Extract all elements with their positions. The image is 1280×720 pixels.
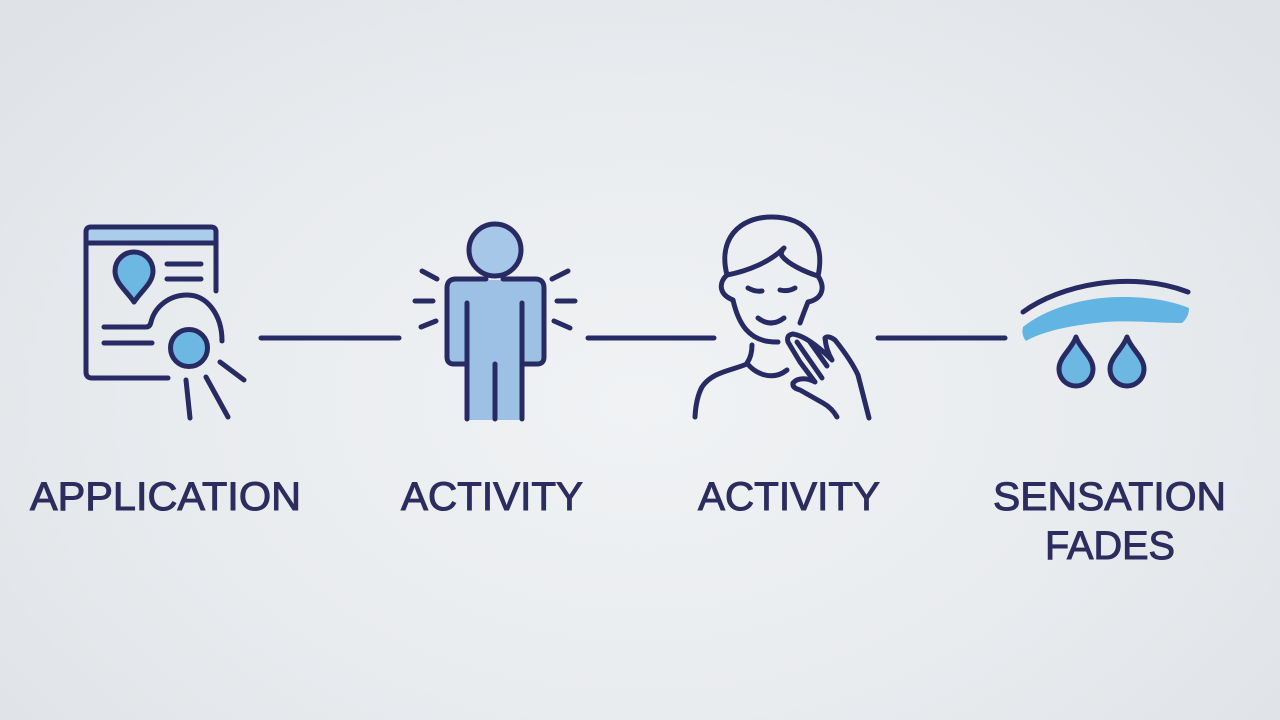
label: activity 1: ACTIVITY [401, 475, 583, 519]
icon: face with hand applying to neck [695, 217, 869, 418]
label: activity 2: ACTIVITY [698, 475, 880, 519]
connector line 1 [261, 336, 399, 340]
icon: brow arc, fading band and drops [1022, 281, 1189, 386]
label: sensation fades: FADES [1045, 524, 1175, 568]
label: sensation fades [993, 475, 1226, 568]
label: application: APPLICATION [30, 475, 301, 519]
connector line 2 [588, 336, 714, 340]
connector line 3 [878, 336, 1005, 340]
label: sensation fades: SENSATION [993, 475, 1226, 519]
icon: person with radiating sensation [415, 224, 575, 420]
icon: application document with applied patch [86, 227, 244, 418]
